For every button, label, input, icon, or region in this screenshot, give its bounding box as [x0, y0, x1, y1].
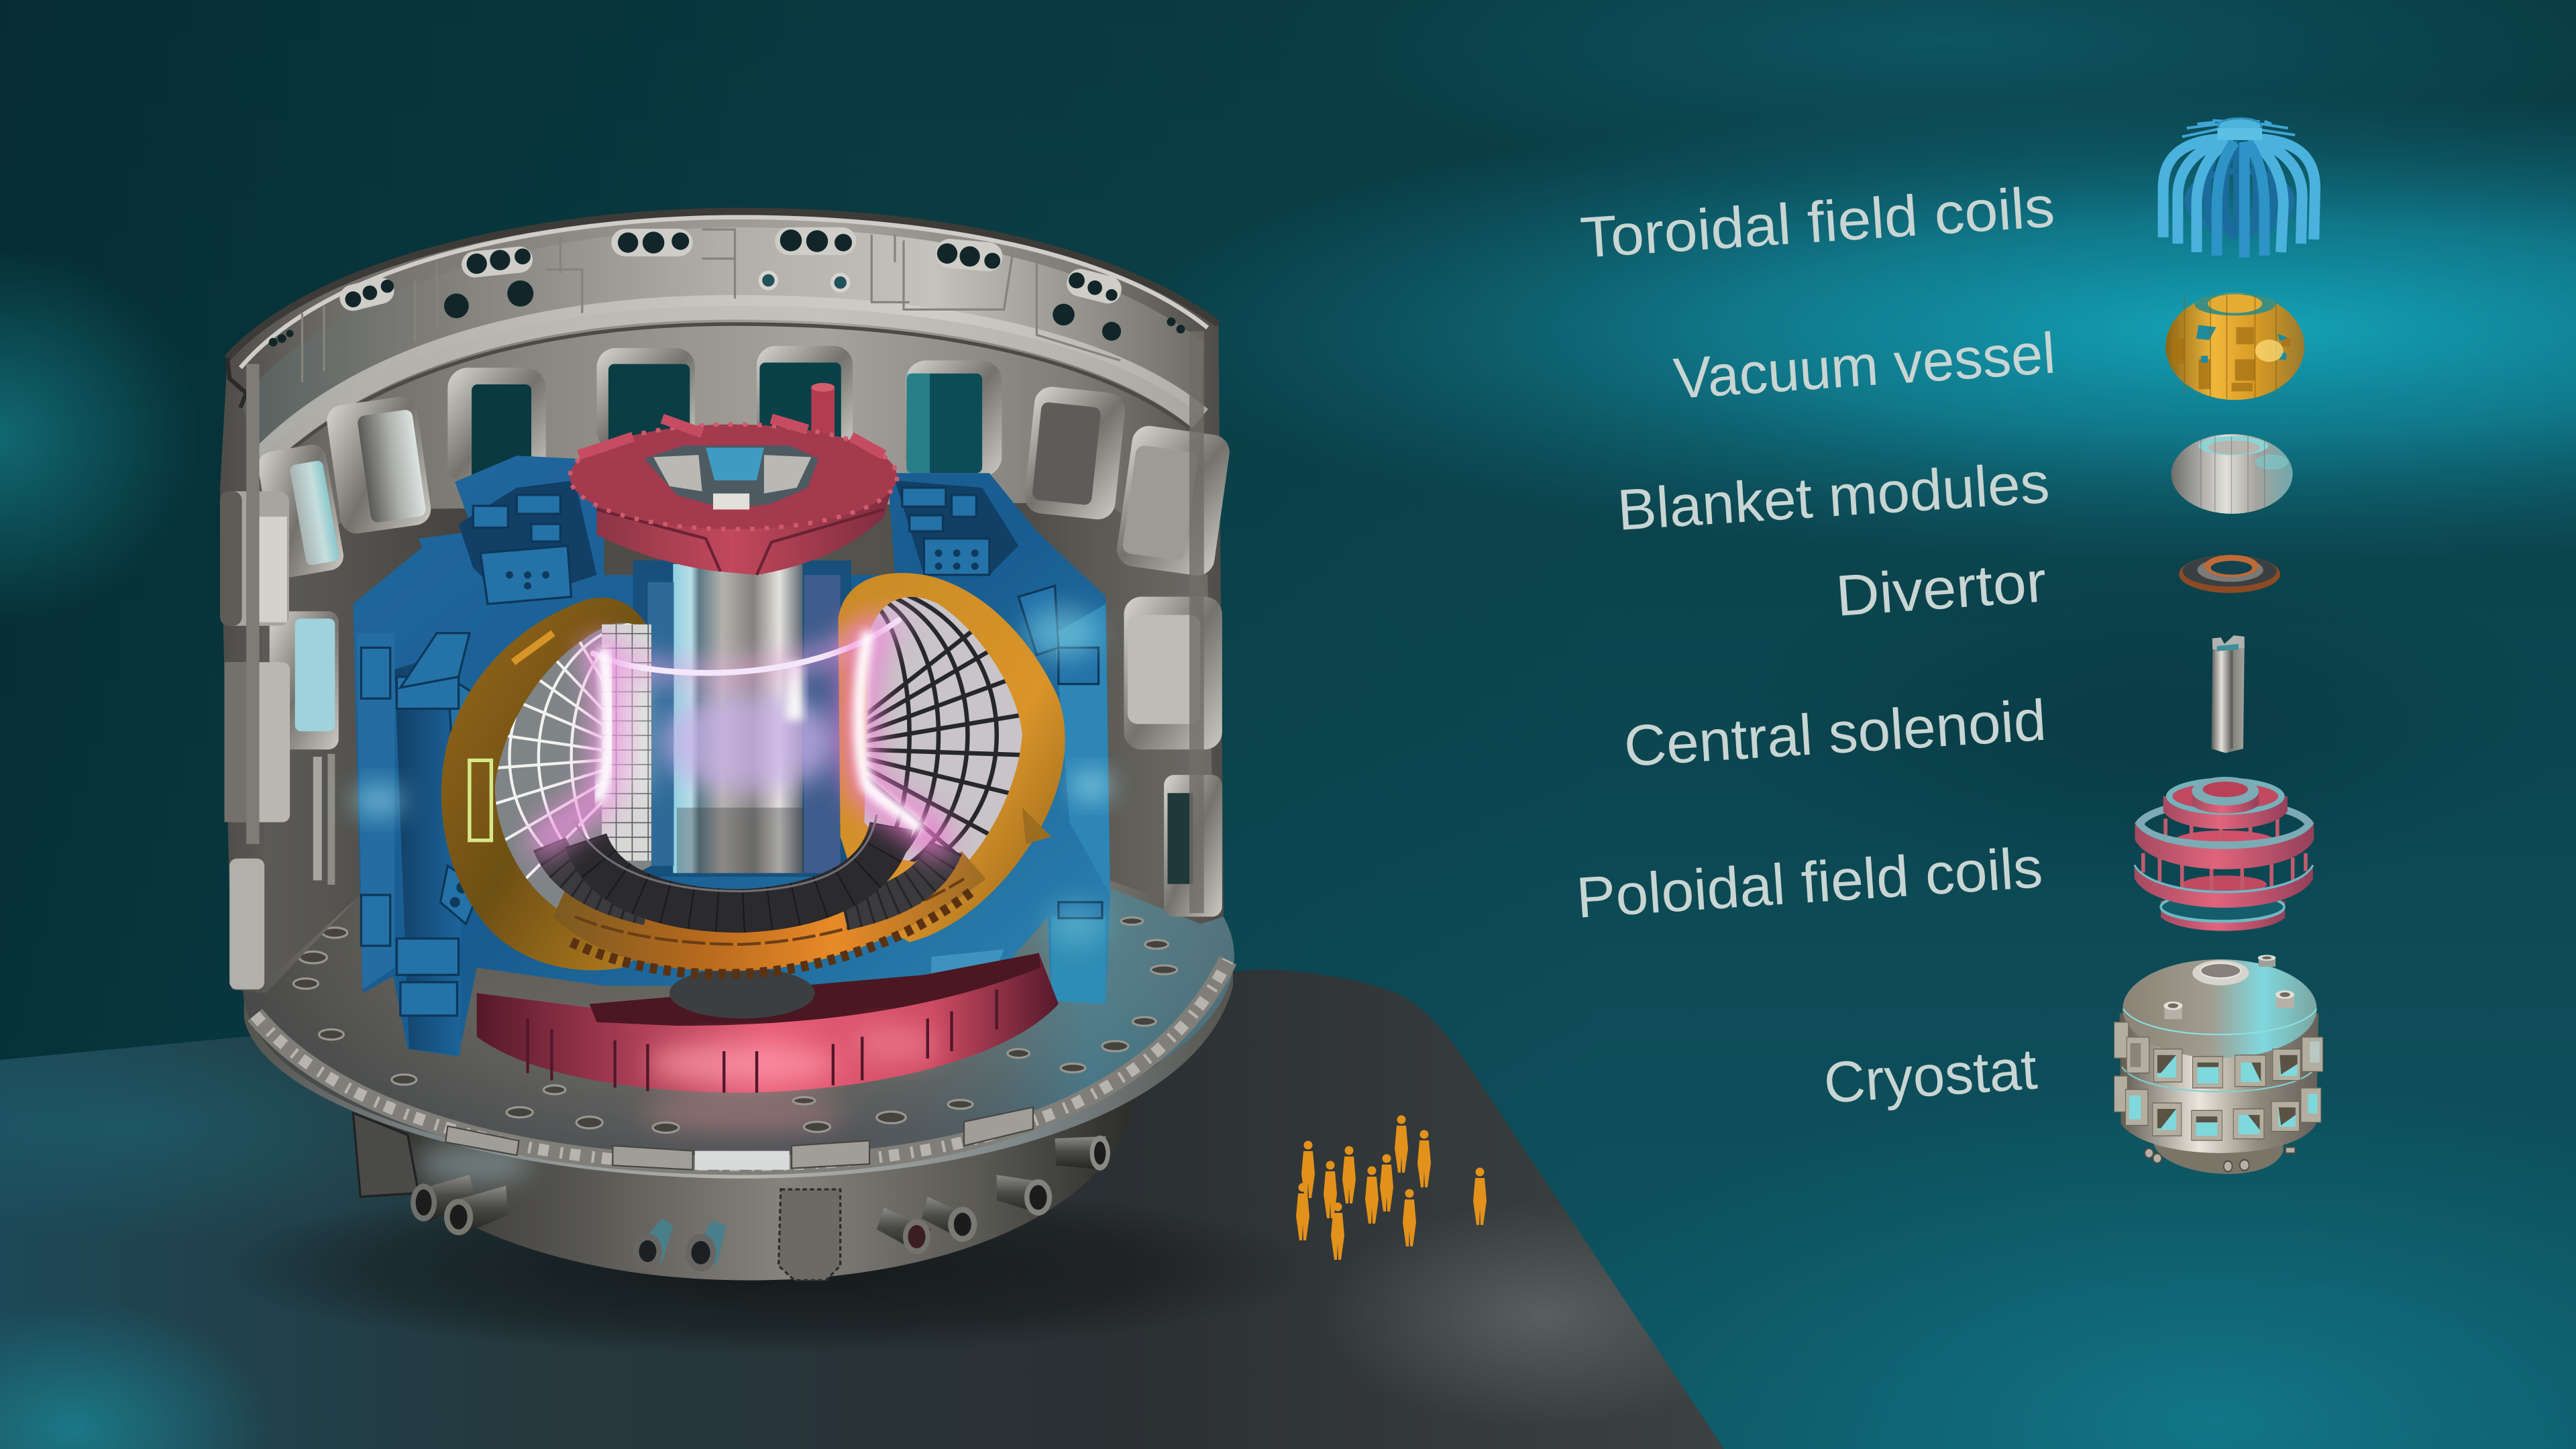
window row	[447, 346, 1002, 484]
band panel lines	[303, 229, 1120, 382]
icon: poloidal field coils	[2135, 777, 2314, 931]
icon: toroidal field coils	[2163, 118, 2315, 258]
labels	[1574, 174, 2057, 1116]
workers	[1296, 1115, 1487, 1260]
label: poloidal field coils: Poloidal field coils	[1574, 835, 2045, 930]
port plate	[779, 1189, 841, 1281]
lower skirt	[353, 1099, 1135, 1281]
icon: divertor	[2179, 555, 2280, 593]
label: divertor: Divertor	[1834, 549, 2049, 629]
toroidal field coil structure	[352, 455, 1112, 1057]
label: cryostat: Cryostat	[1822, 1037, 2039, 1116]
label: blanket modules: Blanket modules	[1615, 451, 2051, 543]
icon: vacuum vessel	[2165, 293, 2304, 400]
label: vacuum vessel: Vacuum vessel	[1672, 321, 2057, 411]
divertor dark tube	[549, 815, 946, 913]
floor platform	[0, 969, 1764, 1449]
component icons upper	[2163, 118, 2315, 753]
vacuum vessel right	[838, 573, 1065, 942]
central backing	[633, 560, 851, 877]
label: toroidal field coils: Toroidal field coils	[1578, 174, 2057, 270]
ledge	[259, 307, 1200, 462]
plasma glow	[546, 620, 935, 841]
side boxes	[220, 331, 1232, 989]
upper poloidal coil	[570, 383, 897, 575]
icon: cryostat	[2114, 955, 2323, 1174]
pipes	[411, 1136, 1110, 1272]
icon: blanket modules	[2171, 434, 2293, 515]
cryostat ports	[2114, 1022, 2323, 1140]
right chamber tiles	[866, 597, 1020, 862]
left chamber tiles	[496, 623, 634, 879]
cryostat pipes	[2145, 1147, 2295, 1172]
label: central solenoid: Central solenoid	[1622, 688, 2048, 779]
divertor copper ring	[553, 851, 986, 974]
central solenoid column	[647, 564, 841, 873]
vacuum vessel left	[441, 597, 665, 970]
hole groups	[269, 227, 1185, 347]
base plate	[236, 759, 1241, 1183]
outer cryostat wall	[220, 211, 1232, 993]
blue block details	[361, 488, 1102, 1016]
upper band	[240, 227, 1204, 459]
lower poloidal coil	[477, 953, 1059, 1093]
component icons lower	[2114, 777, 2323, 1174]
tokamak cutaway	[220, 211, 1241, 1281]
icon: central solenoid	[2212, 635, 2245, 753]
